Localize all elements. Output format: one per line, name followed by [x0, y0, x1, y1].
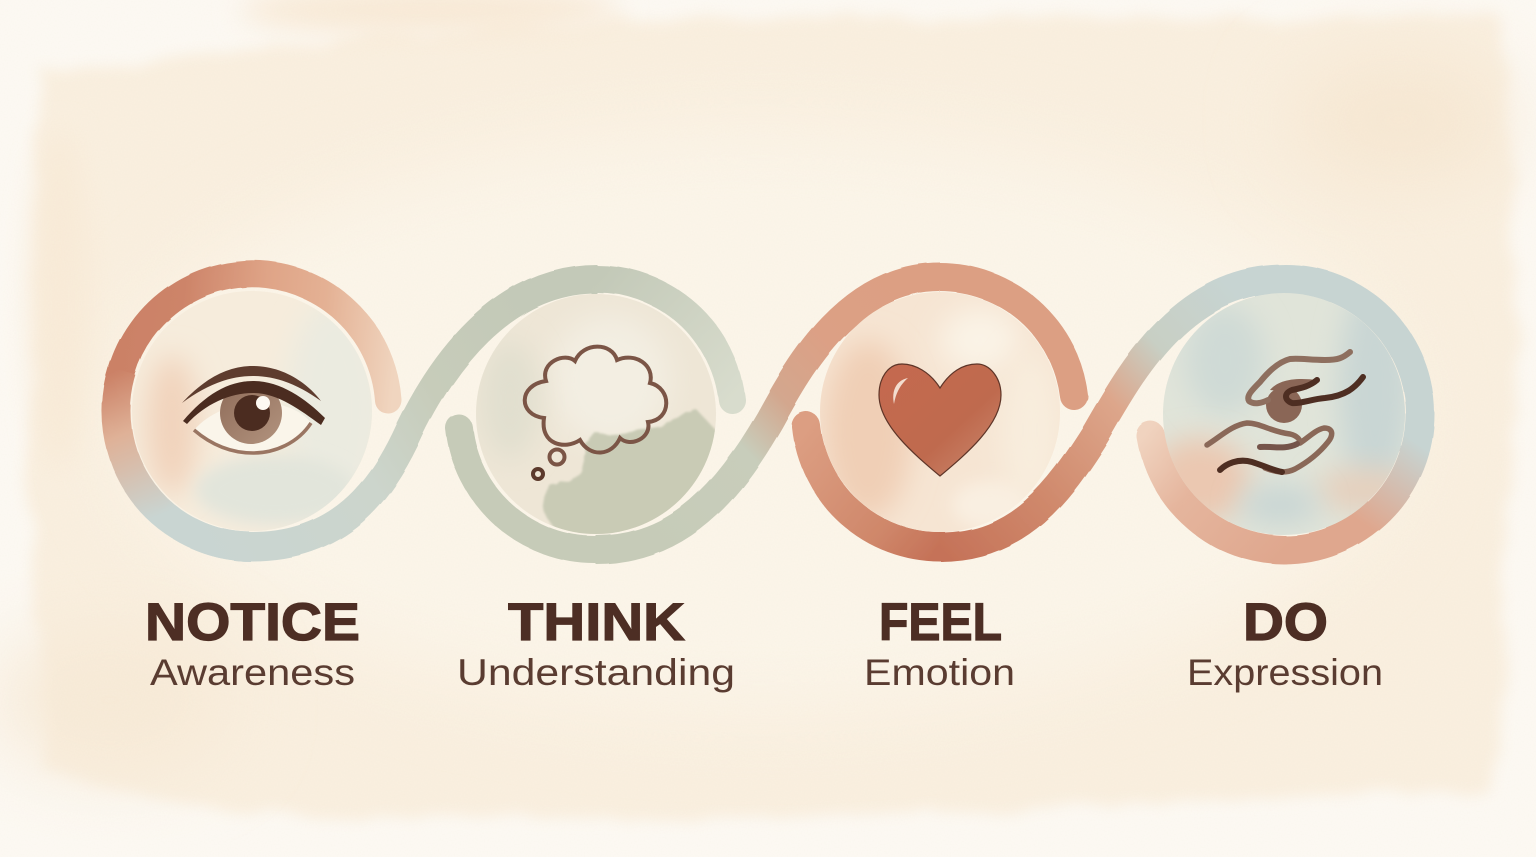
- ribbon: connects feel to do: [806, 279, 1420, 550]
- label: think: [457, 593, 735, 693]
- ribbon: connects notice to think: [116, 274, 732, 547]
- ribbon: connects think to feel: [459, 277, 1074, 550]
- subheading: understanding: Understanding: [457, 652, 735, 693]
- icon: thought cloud: [525, 347, 666, 479]
- panel: do: [1163, 293, 1405, 535]
- icon: eye: [182, 366, 325, 453]
- label: notice: [145, 593, 360, 693]
- icon: heart: [879, 364, 1001, 476]
- heading: do: DO: [1243, 593, 1328, 652]
- panel: notice: [130, 285, 385, 535]
- subheading: awareness: Awareness: [150, 652, 355, 693]
- watercolor circle: think: [476, 294, 716, 534]
- subheading: expression: Expression: [1187, 652, 1383, 693]
- panel: think: [476, 294, 716, 534]
- heading: feel: FEEL: [879, 593, 1002, 652]
- label: do: [1187, 593, 1383, 693]
- icon: giving hands: [1207, 352, 1363, 472]
- heading: notice: NOTICE: [145, 593, 360, 652]
- label: feel: [864, 593, 1015, 693]
- heading: think: THINK: [508, 593, 685, 652]
- watercolor circle: notice: [130, 285, 385, 535]
- panel: feel: [815, 288, 1065, 538]
- watercolor circle: do: [1163, 293, 1405, 535]
- watercolor circle: feel: [815, 288, 1065, 538]
- subheading: emotion: Emotion: [864, 652, 1015, 693]
